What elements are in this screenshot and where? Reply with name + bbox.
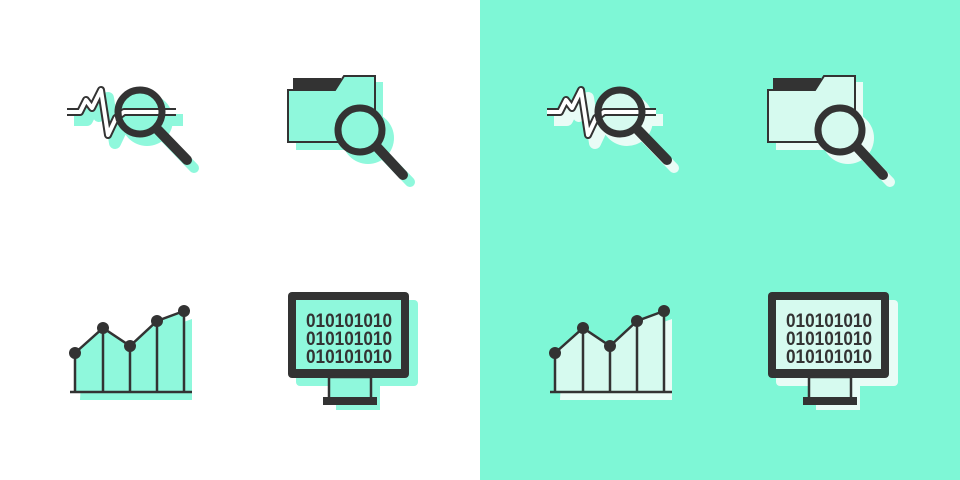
panel: left icon set [67,76,418,410]
icon: pulse magnifier [67,90,194,168]
panel: right icon set [547,76,898,410]
icon: monitor binary: 010101010 [306,347,392,368]
icon: monitor binary: 010101010 [306,329,392,350]
icon: monitor binary (mint): 010101010 [786,311,872,332]
icon: monitor binary (mint): 010101010 [786,329,872,350]
icon: pulse magnifier (mint) [547,90,674,168]
icon: monitor binary (mint): 010101010 [786,347,872,368]
icon: line chart (mint) [549,305,672,400]
icon: monitor binary [288,292,418,410]
icon: folder search [288,76,410,182]
icon: line chart [69,305,192,400]
icon: monitor binary (mint) [768,292,898,410]
icon: monitor binary: 010101010 [306,311,392,332]
panel: right mint background [480,0,960,480]
icon: folder search (mint) [768,76,890,182]
